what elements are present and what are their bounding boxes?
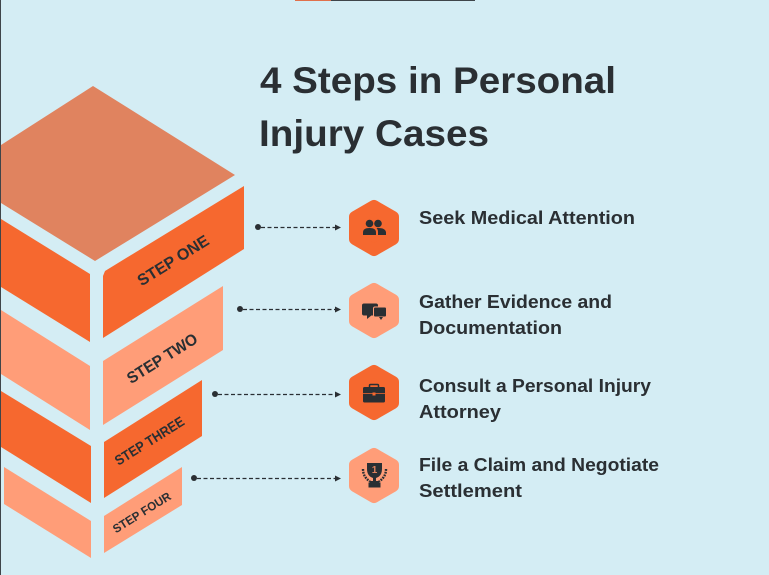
step one block: STEP ONE (135, 232, 213, 290)
icon: people in orange hexagon (355, 206, 393, 250)
arrow: step one (255, 224, 341, 230)
icon: speech bubbles in peach hexagon (355, 289, 393, 332)
icon: trophy in peach hexagon: 1 (372, 465, 378, 476)
text: step four description: Settlement (419, 481, 522, 501)
text: step four description (419, 455, 659, 501)
text: step two description: Documentation (419, 318, 562, 338)
title (259, 60, 616, 154)
step two block (1, 286, 223, 430)
block top face (1, 86, 235, 261)
step two block: STEP TWO (124, 331, 201, 388)
arrow: step three (212, 391, 341, 398)
arrow: step four (191, 475, 341, 482)
step four block (4, 467, 182, 558)
text: step two description (419, 292, 612, 338)
text: step two description: Gather Evidence and (419, 292, 612, 312)
step one block (1, 186, 244, 342)
text: step three description (419, 376, 651, 422)
step three block (1, 380, 202, 503)
text: step three description: Attorney (419, 402, 501, 422)
isometric stacked block (1, 86, 244, 558)
title: Injury Cases (259, 113, 489, 154)
icon: trophy in peach hexagon (355, 454, 393, 497)
step four block: STEP FOUR (110, 489, 174, 536)
text: step four description: File a Claim and Negotiate (419, 455, 659, 475)
text: step one description: Seek Medical Attention (419, 208, 635, 228)
text: step three description: Consult a Personal Injury (419, 376, 651, 396)
step three block: STEP THREE (112, 413, 187, 468)
title: 4 Steps in Personal (260, 60, 616, 101)
icon: briefcase in orange hexagon (355, 371, 393, 414)
arrow: step two (237, 306, 341, 312)
